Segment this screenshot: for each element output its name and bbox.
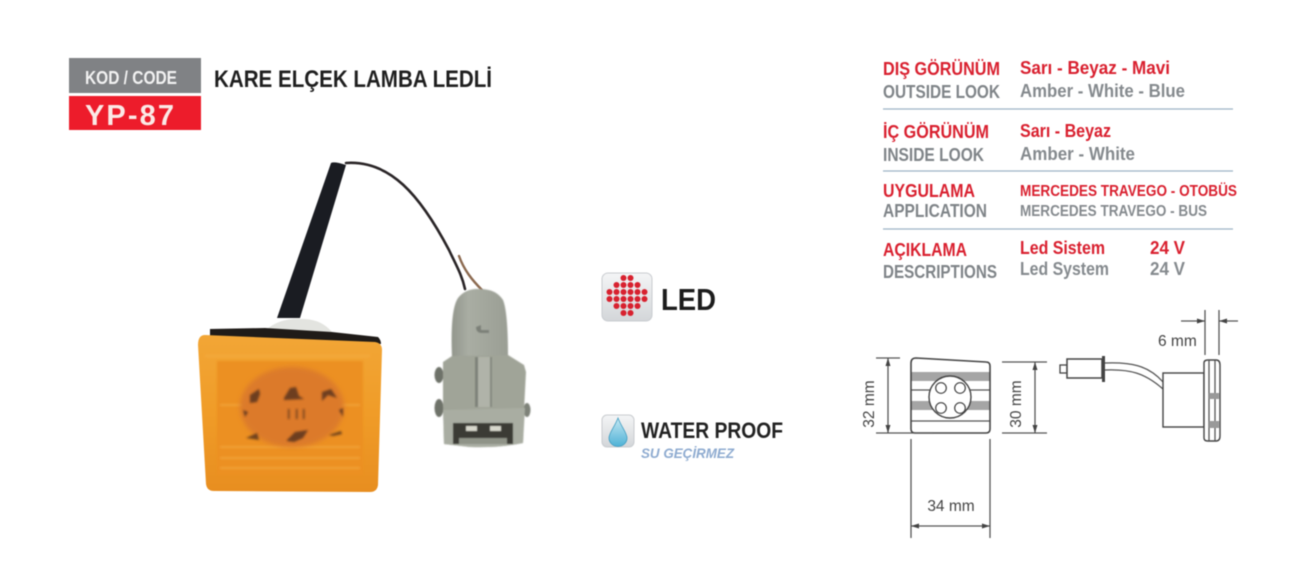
water proof feature [602,415,783,461]
dimension: 30 mm [1002,362,1047,433]
side view plug [1060,356,1105,382]
spec row: inside look [883,121,1135,165]
spec row: application: APPLICATION [883,201,987,221]
spec row: descriptions: 24 V [1150,259,1185,279]
spec row: application: MERCEDES TRAVEGO - OTOBÜS [1020,181,1237,200]
technical drawing: side view [1060,310,1238,441]
LED label: LED [661,282,716,317]
product code badge [69,58,201,132]
dimension: 34 mm: 34 mm [927,498,975,515]
spec row: descriptions: Led Sistem [1020,238,1105,258]
product photo: lamp with connector [198,162,530,492]
specification table [883,58,1237,282]
spec row: outside look [883,58,1185,102]
LED shapes [243,387,343,442]
dimension: 30 mm: 30 mm [1008,380,1025,428]
LED feature [602,273,716,321]
code label: KOD / CODE [85,68,177,88]
front view body [911,358,990,433]
dimension: 34 mm [911,439,990,538]
spec row: outside look: DIŞ GÖRÜNÜM [883,59,1000,79]
side view wires [1105,363,1163,389]
connector [434,289,530,447]
spec row: descriptions: 24 V [1150,238,1185,258]
thin wires [346,163,482,290]
spec row: application [883,181,1237,221]
spec row: inside look: Sarı - Beyaz [1020,121,1111,141]
spec row: application: MERCEDES TRAVEGO - BUS [1020,203,1207,220]
water proof Turkish label: SU GEÇİRMEZ [641,445,734,461]
lamp top edge [210,328,381,344]
code number: YP-87 [85,100,174,132]
water proof label: WATER PROOF [641,418,783,443]
lamp base collar [266,319,332,338]
spec row: descriptions: DESCRIPTIONS [883,262,997,282]
dimension: 32 mm [861,358,933,433]
spec row: descriptions [883,238,1185,282]
connector socket [453,423,513,444]
lens inner circle [240,367,344,447]
thick black cable [277,162,346,318]
title: KARE ELÇEK LAMBA LEDLİ [214,66,492,93]
spec row: inside look: İÇ GÖRÜNÜM [883,122,989,142]
icon: water drop [602,415,634,447]
technical drawing: front view [861,358,1047,538]
dimension: 32 mm: 32 mm [861,380,878,428]
spec row: inside look: INSIDE LOOK [883,145,984,165]
spec row: descriptions: AÇIKLAMA [883,240,967,260]
spec row: application: UYGULAMA [883,181,975,201]
side view body [1163,360,1220,441]
lamp lens [198,335,382,492]
spec row: inside look: Amber - White [1020,144,1135,164]
dimension: 6 mm [1158,310,1238,355]
spec row: outside look: OUTSIDE LOOK [883,82,1000,102]
spec row: outside look: Amber - White - Blue [1020,81,1185,101]
dimension: 6 mm: 6 mm [1158,333,1197,350]
spec row: outside look: Sarı - Beyaz - Mavi [1020,58,1170,78]
spec row: descriptions: Led System [1020,259,1109,279]
icon: LED matrix [602,273,652,321]
